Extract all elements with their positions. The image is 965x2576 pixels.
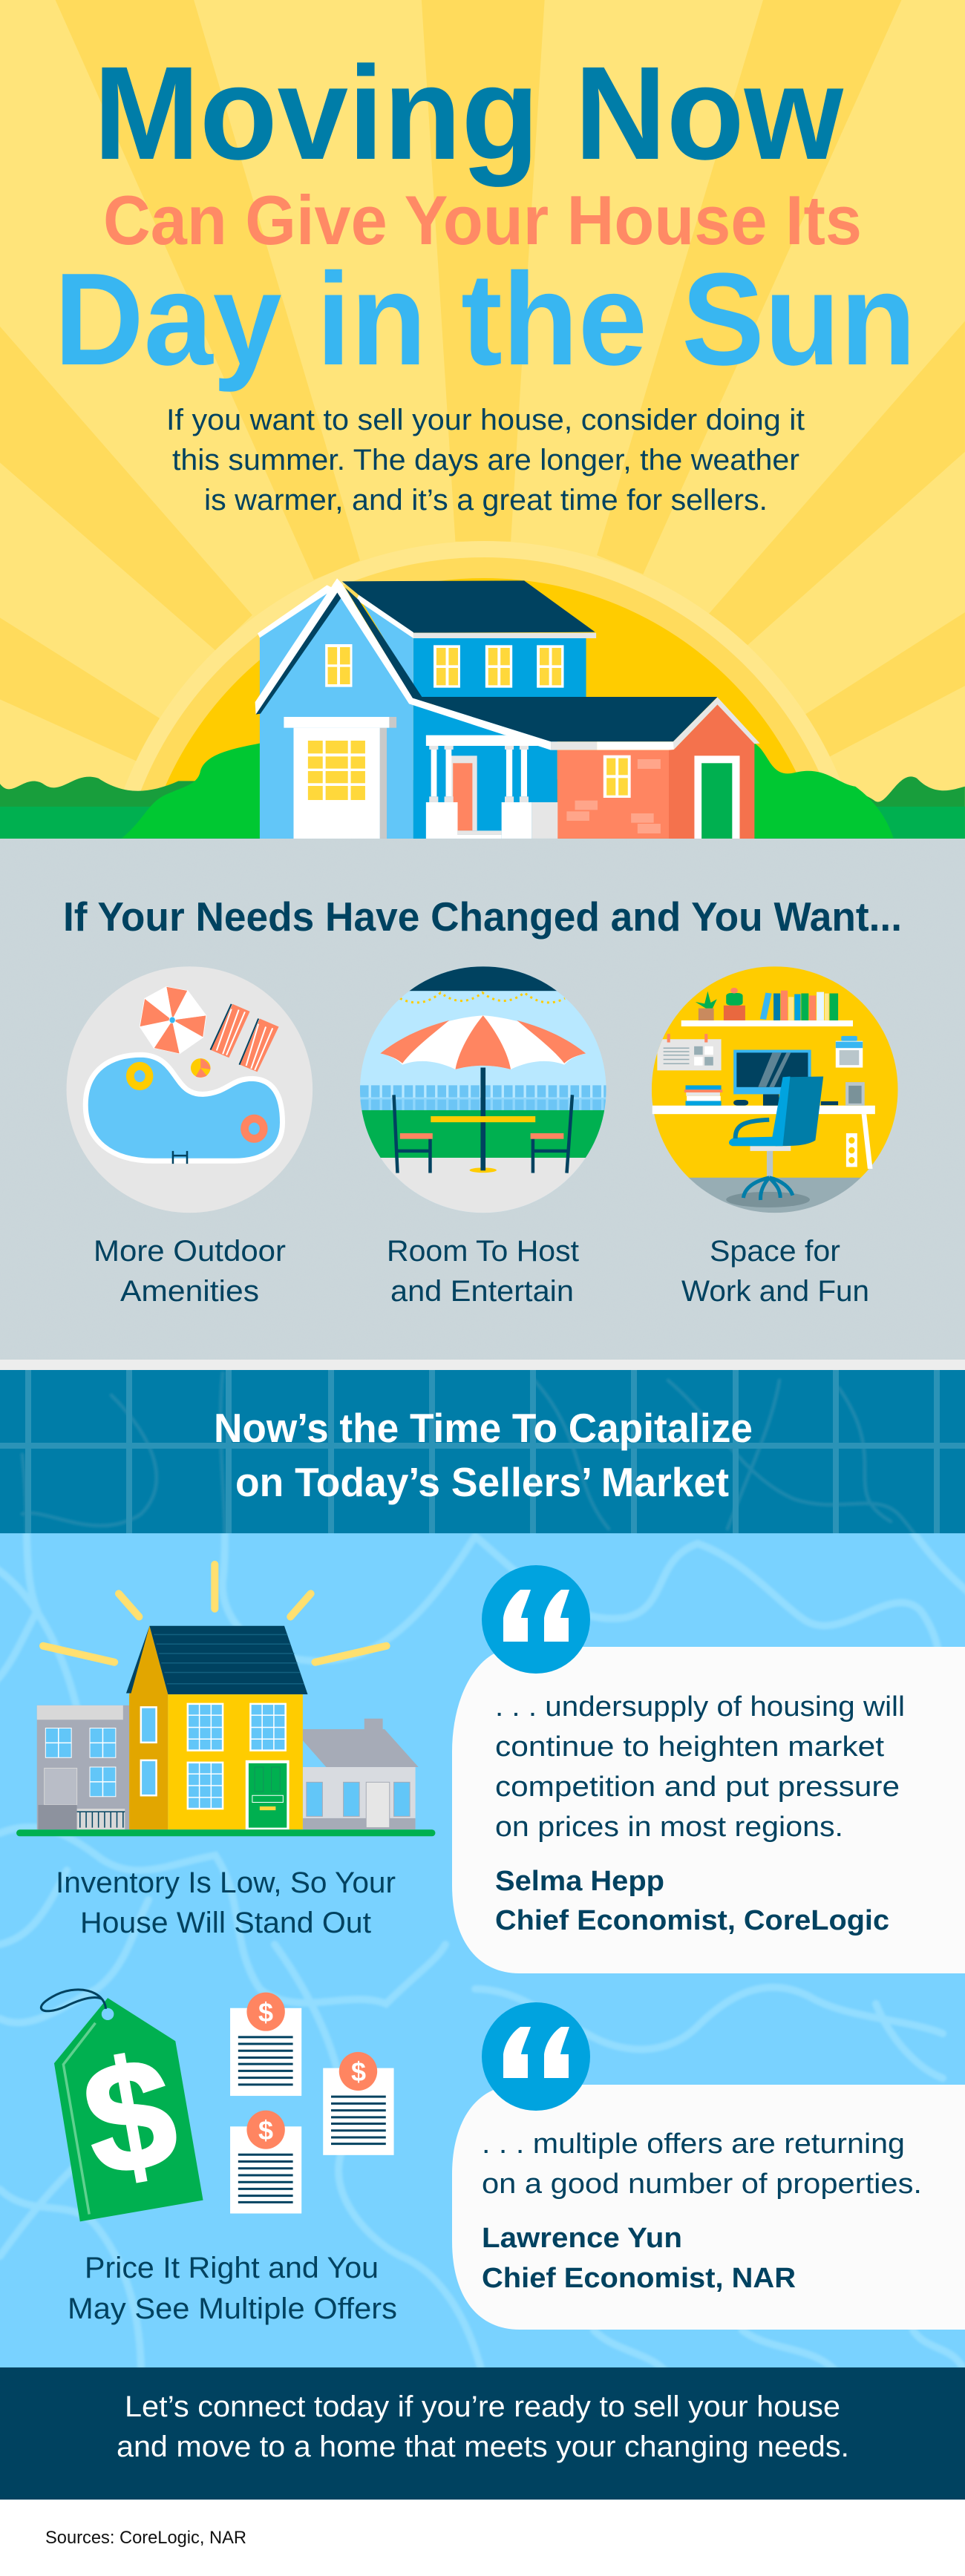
chairs	[394, 1095, 572, 1173]
ground line	[20, 1829, 432, 1836]
quote text: on a good number of properties.	[482, 2169, 922, 2200]
intro paragraph: is warmer, and it’s a great time for sellers.	[204, 484, 768, 517]
quote badge	[482, 1565, 590, 1674]
offer sheets	[230, 2008, 301, 2096]
caption: price it right: May See Multiple Offers	[68, 2292, 397, 2325]
caption: inventory low: Inventory Is Low, So Your	[56, 1867, 396, 1899]
computer monitor	[733, 1050, 811, 1106]
yellow house	[126, 1626, 307, 1829]
shelf with plants and books	[681, 988, 853, 1026]
circle caption: host and entertain: and Entertain	[390, 1275, 574, 1308]
caption: price it right	[68, 2252, 397, 2325]
calendar	[836, 1036, 863, 1068]
attribution: Lawrence Yun	[482, 2223, 682, 2254]
circle caption: work and fun	[681, 1235, 869, 1308]
sources: Sources: CoreLogic, NAR	[45, 2528, 246, 2548]
desk	[652, 1082, 875, 1169]
title line: Day in the Sun: Day in the Sun	[54, 246, 916, 393]
dollar signs on sheets: $	[351, 2056, 366, 2087]
sun loungers	[211, 1004, 279, 1072]
background: sunny sky	[0, 0, 965, 839]
quote text: . . . undersupply of housing will	[495, 1691, 905, 1723]
circle caption: work and fun: Space for	[710, 1235, 840, 1268]
quote badge	[482, 2002, 590, 2111]
fence	[360, 1092, 606, 1110]
icon: backyard pool circle	[67, 966, 313, 1213]
intro paragraph	[166, 404, 805, 517]
icon: patio circle	[360, 966, 606, 1215]
attribution	[482, 2223, 796, 2294]
section background: pool water	[0, 1533, 965, 2367]
quote text: on prices in most regions.	[495, 1812, 843, 1843]
heading: sellers' market	[214, 1405, 753, 1505]
dollar signs on sheets: $	[258, 2115, 273, 2146]
wall socket	[846, 1133, 857, 1167]
title line: Can Give Your House Its: Can Give Your House Its	[103, 181, 862, 259]
heading: needs changed: If Your Needs Have Changed and You Want...	[63, 894, 902, 940]
grey townhouse	[37, 1705, 129, 1829]
green hills	[0, 743, 965, 839]
quote card: Lawrence Yun	[452, 2002, 965, 2330]
pool rings	[126, 1062, 268, 1143]
heading: sellers' market: Now’s the Time To Capitalize	[214, 1405, 753, 1451]
illustration: two-storey house	[255, 578, 760, 839]
quote text: competition and put pressure	[495, 1772, 900, 1803]
call to action band: Let’s connect today if you’re ready to sell your house	[125, 2390, 840, 2423]
caption: price it right: Price It Right and You	[85, 2252, 379, 2284]
dollar sign on tag: $	[72, 2023, 188, 2209]
dollar signs on sheets: $	[258, 1997, 273, 2028]
circle caption: outdoor amenities: Amenities	[120, 1275, 259, 1308]
icon: row of houses with shine lines	[20, 1564, 432, 1833]
parasol	[380, 1015, 586, 1069]
icon: home office circle	[652, 966, 898, 1213]
table	[431, 1116, 535, 1122]
ladder	[173, 1151, 187, 1164]
intro paragraph: this summer. The days are longer, the weather	[172, 444, 799, 476]
quote card: Selma Hepp	[452, 1565, 965, 1973]
beach ball	[191, 1058, 211, 1078]
circle caption: outdoor amenities: More Outdoor	[94, 1235, 286, 1268]
attribution	[495, 1866, 889, 1936]
parasol from above	[140, 986, 206, 1054]
quote text	[482, 2128, 922, 2200]
right grey cottage	[303, 1719, 419, 1829]
attribution: Selma Hepp	[495, 1866, 664, 1897]
sun with halo rings	[99, 541, 869, 1311]
call to action band: and move to a home that meets your changing needs.	[117, 2431, 849, 2463]
icon: price tag and offers	[41, 1990, 394, 2221]
dollar signs on sheets	[258, 1997, 366, 2146]
circle caption: host and entertain	[387, 1235, 579, 1308]
intro paragraph: If you want to sell your house, consider doing it	[166, 404, 805, 436]
call to action band	[0, 2367, 965, 2500]
attribution: Chief Economist, NAR	[482, 2263, 796, 2294]
caption: inventory low	[56, 1867, 396, 1939]
bulletin board	[657, 1034, 722, 1070]
string lights	[400, 993, 565, 1003]
section background: grey pavement	[0, 839, 965, 1360]
tag	[54, 1998, 203, 2221]
office chair	[729, 1076, 823, 1200]
circle caption: host and entertain: Room To Host	[387, 1235, 579, 1268]
quote text: . . . multiple offers are returning	[482, 2128, 905, 2160]
heading: sellers' market: on Today’s Sellers’ Market	[235, 1459, 729, 1505]
circle caption: outdoor amenities	[94, 1235, 286, 1308]
quote text: continue to heighten market	[495, 1731, 884, 1763]
attribution: Chief Economist, CoreLogic	[495, 1905, 889, 1936]
shine lines	[43, 1564, 387, 1662]
circle caption: work and fun: Work and Fun	[681, 1275, 869, 1308]
title	[54, 39, 916, 393]
caption: inventory low: House Will Stand Out	[80, 1907, 371, 1939]
title line: Moving Now: Moving Now	[94, 39, 844, 187]
quote text	[495, 1691, 905, 1843]
pool	[85, 1055, 283, 1161]
sun rays	[0, 0, 965, 762]
section background: pool tile banner	[0, 1370, 965, 1533]
pool edge strip	[0, 1360, 965, 1370]
